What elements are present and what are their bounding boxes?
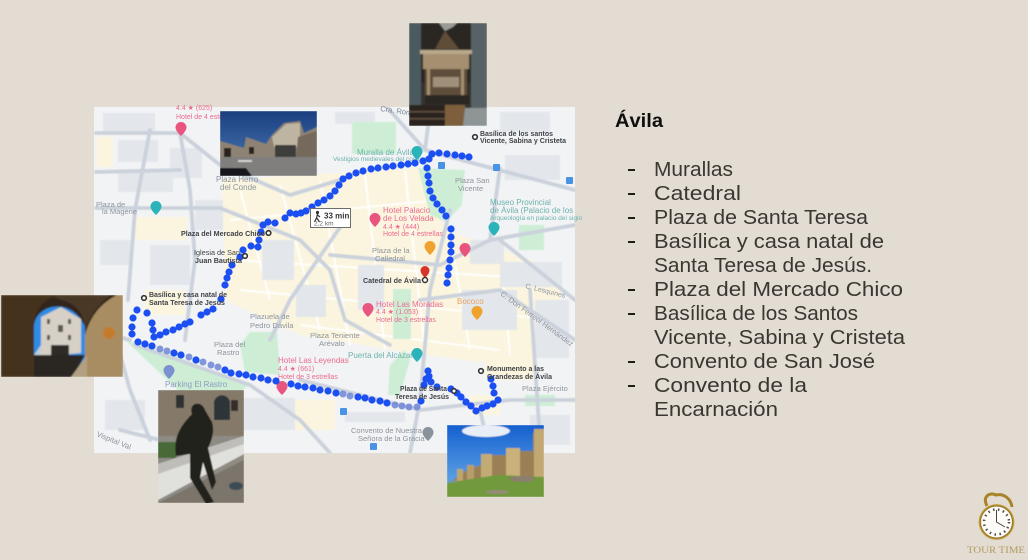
stop labels: Catedral de Ávila — [363, 276, 422, 285]
stop labels — [149, 129, 567, 401]
stop labels: Juan Bautista — [195, 256, 243, 265]
walking route — [132, 153, 498, 411]
stop labels: Santa Teresa de Jesús — [149, 298, 225, 307]
icon: walker — [314, 212, 320, 222]
map labels: Plaza San — [455, 176, 490, 185]
photo: cathedral interior — [409, 23, 487, 126]
list of sights: Basílica de los Santos — [654, 302, 858, 325]
pink hotel labels: 4.4 ★ (661) — [278, 365, 314, 373]
map pins — [150, 122, 573, 450]
list of sights: Encarnación — [654, 398, 778, 421]
icon: teal pins — [150, 146, 500, 362]
stop labels: Monumento a las — [487, 364, 544, 373]
title: Ávila — [615, 110, 663, 132]
list of sights: Vicente, Sabina y Cristeta — [654, 326, 906, 349]
walking time callout: 33 min — [324, 212, 349, 220]
pink hotel labels: de Los Velada — [383, 214, 434, 223]
stop labels: Grandezas de Ávila — [487, 372, 553, 381]
logo: Tour Time pocket watch: TOUR TIME — [967, 545, 1026, 555]
map labels: Cra. Rom — [380, 104, 413, 117]
photo: Santa Teresa statue — [158, 390, 244, 504]
pink hotel labels: Hotel de 3 estrellas — [278, 374, 338, 381]
stop labels: Teresa de Jesús — [395, 392, 449, 401]
stop labels: Plaza de Santa — [400, 384, 448, 393]
teal place labels — [165, 148, 583, 389]
pink hotel labels: Hotel de 3 estrellas — [376, 317, 436, 324]
map labels — [95, 104, 575, 452]
map labels: Plaza Ejército — [522, 384, 568, 393]
list of sights: Plaza de Santa Teresa — [654, 206, 869, 229]
icon: orange restaurant pins — [424, 241, 482, 320]
route stop markers — [142, 135, 483, 393]
pink hotel labels: Hotel Las Moradas — [376, 300, 443, 309]
map labels: la Magene — [102, 207, 137, 216]
map labels: Plazuela de — [250, 312, 290, 321]
map labels: Calledral — [375, 254, 405, 263]
map: green parks — [125, 122, 555, 406]
map labels: Arévalo — [319, 339, 345, 348]
teal place labels: Vestigios medievales del conjunto — [333, 156, 431, 163]
map labels: Vispital Val — [95, 430, 133, 452]
pink hotel labels: 4.4 ★ (444) — [383, 223, 419, 231]
stop labels: Basílica de los santos — [480, 129, 553, 138]
list of sights: Santa Teresa de Jesús. — [654, 254, 872, 277]
teal place labels: Museo Provincial — [490, 198, 551, 207]
list of sights: Basílica y casa natal de — [654, 230, 884, 253]
teal place labels: Parking El Rastro — [165, 380, 228, 389]
map labels: Vicente — [458, 184, 483, 193]
map labels: C. Don Ferreol Hernández — [499, 289, 575, 348]
teal place labels: Arqueología en palacio del siglo — [490, 215, 583, 222]
icon: grey church pin — [422, 427, 434, 441]
stop labels: Basílica y casa natal de — [149, 290, 227, 299]
icon: bus stops — [340, 162, 573, 450]
pink hotel labels — [176, 104, 484, 381]
pink hotel labels: 4.4 ★ (625) — [176, 104, 212, 112]
icon: cathedral red pin — [420, 266, 430, 282]
map: cream city blocks — [97, 137, 560, 430]
map: white streets across blocks — [230, 170, 560, 355]
map labels: del Conde — [220, 183, 257, 192]
list of sights: Murallas — [654, 158, 733, 181]
icon: hotel pins — [176, 122, 470, 395]
map labels: Señora de la Gracia — [358, 434, 426, 443]
pink hotel labels: 4.4 ★ (1.053) — [376, 308, 418, 316]
photo: walls of Ávila — [447, 425, 544, 497]
map: roads — [94, 105, 575, 453]
map labels: Plaza Herro — [216, 175, 259, 184]
teal place labels: Muralla de Ávila — [357, 148, 414, 157]
map labels: Plaza de la — [372, 246, 410, 255]
map labels: Plaza del — [214, 340, 246, 349]
list of sights: Convento de San José — [654, 350, 875, 373]
pink hotel labels: Hotel Las Leyendas — [278, 356, 349, 365]
stop labels: Vicente, Sabina y Cristeta — [480, 136, 567, 145]
map: grey buildings — [100, 112, 570, 445]
pink hotel labels: Hotel de 4 estrellas — [383, 231, 443, 238]
stop labels: Iglesia de San — [194, 248, 240, 257]
logo: Tour Time pocket watch — [967, 494, 1026, 555]
list of sights: Plaza del Mercado Chico — [654, 278, 903, 301]
pink hotel labels: Hotel Palacio — [383, 206, 431, 215]
map labels: Pedro Dávila — [250, 321, 294, 330]
icon: parking pin — [164, 365, 174, 379]
pink hotel labels: Hotel de 4 estrellas — [176, 114, 236, 121]
walking time callout: 2,2 km — [314, 220, 334, 228]
map labels: Convento de Nuestra — [351, 426, 423, 435]
map labels: C. Lesquines — [525, 283, 566, 300]
teal place labels: Puerta del Alcázar — [348, 351, 413, 360]
map labels: Rastro — [217, 348, 239, 357]
map labels: Plaza Teniente — [310, 331, 360, 340]
list of sights: Catedral — [654, 182, 741, 205]
map panel — [94, 105, 575, 453]
walking time callout — [310, 208, 350, 228]
map labels: Plaza de — [96, 200, 125, 209]
list dashes — [628, 169, 635, 387]
list of sights — [628, 158, 906, 421]
photo: basílica through arch — [1, 295, 123, 377]
stop labels: Plaza del Mercado Chico — [181, 229, 265, 238]
pink hotel labels: Bococo — [457, 297, 484, 306]
photo: plaza del mercado church — [220, 111, 317, 176]
list of sights: Convento de la — [654, 374, 808, 397]
teal place labels: de Ávila (Palacio de los — [490, 206, 573, 215]
